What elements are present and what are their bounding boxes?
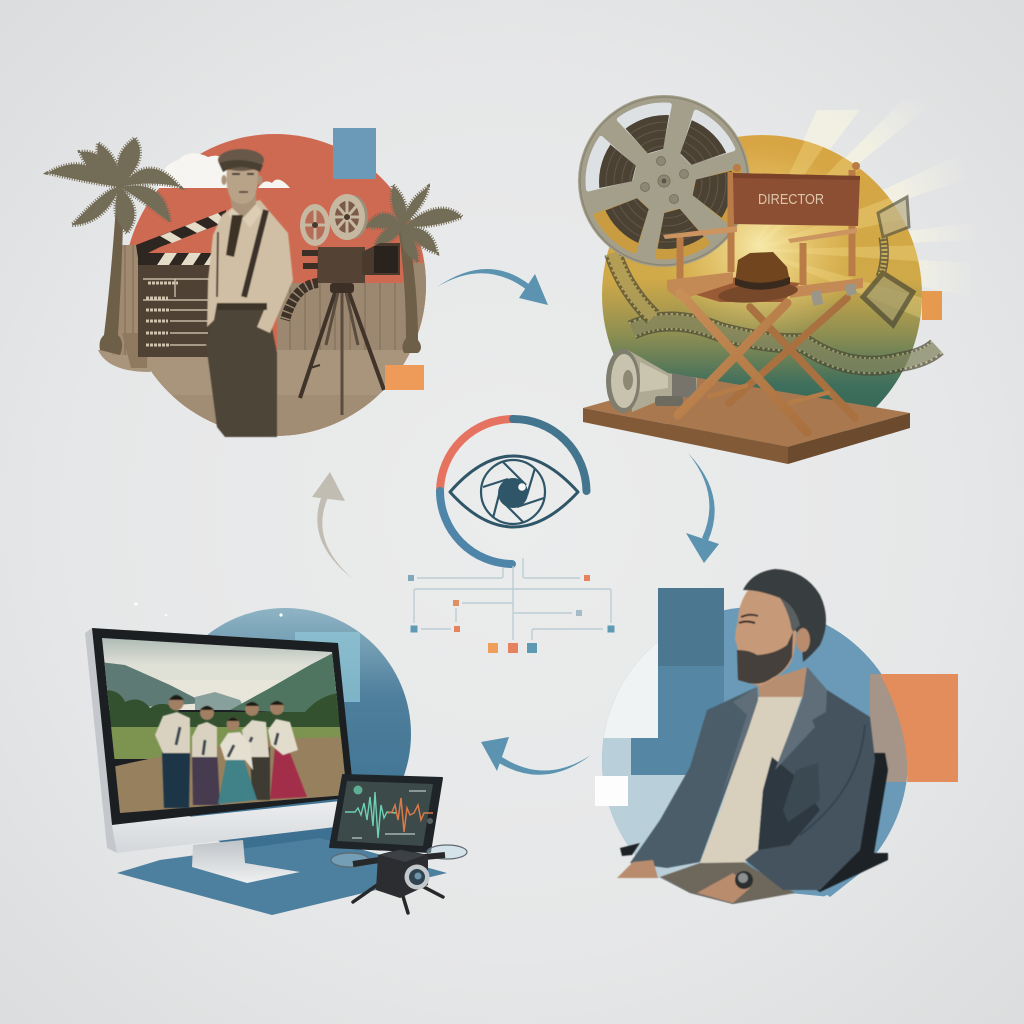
connector lines <box>414 558 611 640</box>
orange square accent <box>385 365 424 390</box>
circuit diagram <box>408 558 614 653</box>
front legs <box>678 293 807 432</box>
cloud <box>158 153 290 188</box>
wooden platform <box>583 377 910 464</box>
central eye emblem <box>440 419 586 564</box>
office chair <box>800 753 888 892</box>
canvas back <box>733 173 860 226</box>
panel: silent-era film set <box>48 128 462 445</box>
back posts <box>680 170 852 285</box>
gold-green circle <box>602 135 922 455</box>
blue circle with geometric blocks <box>602 608 908 904</box>
panel: digital post-production <box>85 602 467 915</box>
hands and watch <box>617 860 658 878</box>
seated man <box>617 569 888 904</box>
dark blue rectangle <box>658 588 724 666</box>
red sun circle <box>124 134 426 436</box>
ring: dark blue segment <box>513 419 586 491</box>
clapperboard <box>136 210 226 357</box>
aperture <box>481 460 545 524</box>
arrow: right, chair to director <box>686 453 719 563</box>
screen photo <box>100 635 350 815</box>
blue square accent <box>333 128 376 179</box>
eye outline <box>450 456 578 527</box>
barrel stump <box>122 333 148 368</box>
monitor <box>85 628 354 853</box>
arrow: bottom, director to screen <box>481 737 591 775</box>
blue triangle <box>817 860 868 897</box>
arrow: top, set to chair <box>437 269 548 305</box>
mountains <box>104 662 195 708</box>
director's chair <box>663 162 863 432</box>
film camera on tripod <box>285 194 400 415</box>
translucent square <box>295 632 360 702</box>
panel: director's chair <box>578 95 973 464</box>
t-shirt <box>700 697 802 863</box>
ring: light blue segment <box>440 491 512 564</box>
field <box>100 727 350 759</box>
waveforms <box>345 792 396 838</box>
node squares <box>408 575 614 653</box>
sparkle dots <box>134 602 283 617</box>
palm tree left <box>48 138 180 355</box>
panel: contemporary director portrait <box>595 569 960 918</box>
rays inside circle <box>786 141 922 318</box>
floor diamond <box>117 838 447 915</box>
dirt path <box>100 737 345 815</box>
mid blue rectangle <box>631 666 724 775</box>
young man in flat cap <box>206 149 293 437</box>
pupil <box>498 478 528 508</box>
seat <box>680 277 800 302</box>
arms <box>663 226 737 239</box>
light rays <box>753 100 973 297</box>
hat <box>717 281 799 305</box>
head and face <box>735 590 796 686</box>
camera drone <box>331 845 467 913</box>
monitor stand <box>192 840 300 883</box>
orange square accent <box>922 291 942 320</box>
ground and fence <box>98 245 440 445</box>
ring: coral segment <box>440 419 513 491</box>
jacket <box>630 687 758 868</box>
tablet with audio waveform <box>330 775 442 852</box>
rear legs <box>729 298 855 418</box>
megaphone <box>606 349 697 413</box>
orange block <box>880 674 958 782</box>
palm tree right <box>365 185 462 353</box>
glow behind chair <box>660 145 860 345</box>
film strips <box>613 197 937 366</box>
arrow: left, screen to set <box>312 472 353 579</box>
film reel <box>578 95 750 267</box>
villagers in hanbok <box>155 695 307 808</box>
trousers <box>660 862 795 904</box>
white square <box>595 776 628 806</box>
neck <box>758 667 807 707</box>
treeline <box>105 690 340 735</box>
blue circle <box>159 608 411 860</box>
chair label: DIRECTOR <box>758 191 824 208</box>
